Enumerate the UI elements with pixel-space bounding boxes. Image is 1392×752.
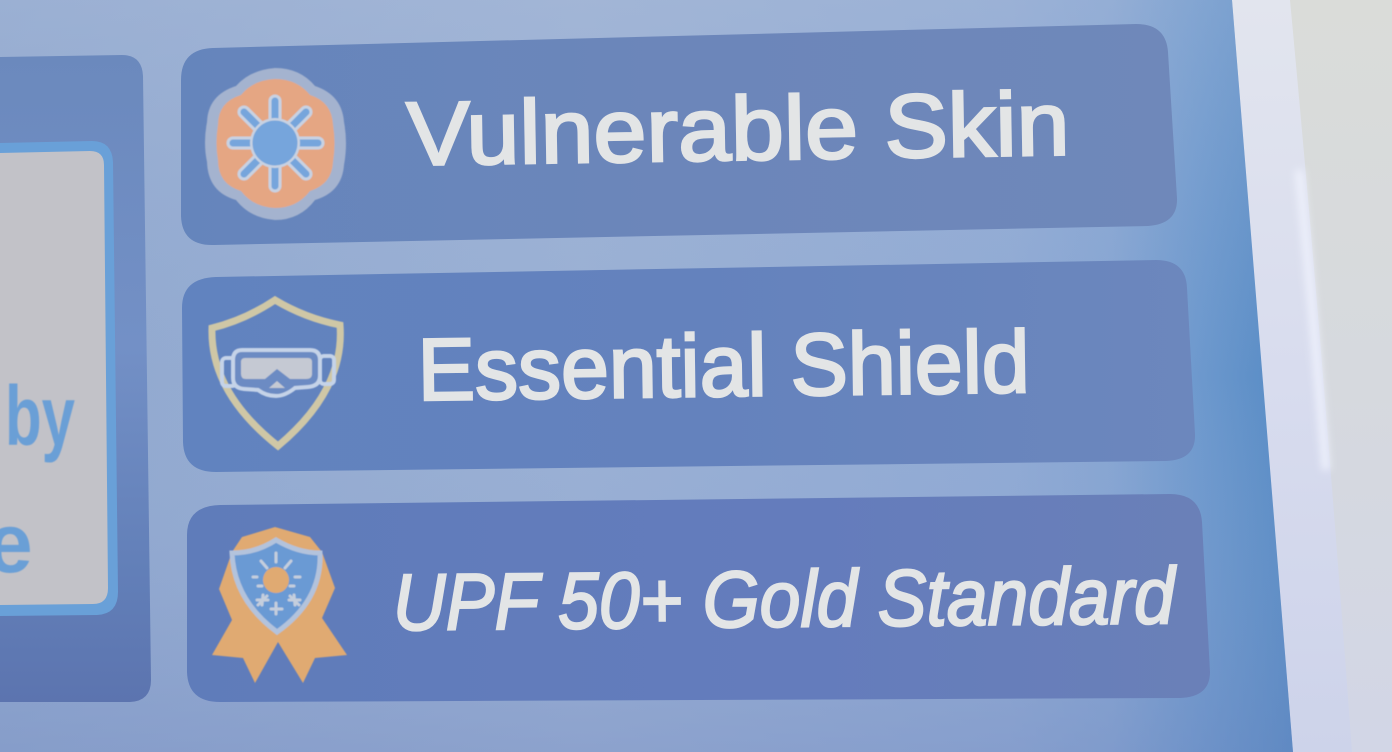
heading: Essential Shield: Essential Shield bbox=[417, 312, 1030, 419]
panel: UPF 50+ gold standard bar bbox=[187, 494, 1210, 702]
panel: left partially cropped card bbox=[0, 55, 151, 702]
cropped text: by: by bbox=[5, 369, 75, 463]
panel: vulnerable skin bar bbox=[181, 24, 1177, 245]
icon: award rosette with shield bbox=[212, 527, 347, 683]
heading: Vulnerable Skin: Vulnerable Skin bbox=[406, 75, 1070, 185]
icon: shield with goggles bbox=[212, 300, 340, 446]
white poster margin bbox=[1225, 0, 1352, 752]
inner framed box bbox=[0, 141, 118, 616]
icon: virus on orange blob bbox=[205, 68, 346, 220]
heading: UPF 50+ Gold Standard: UPF 50+ Gold Standard bbox=[392, 551, 1177, 647]
panel: essential shield bar bbox=[182, 260, 1195, 472]
